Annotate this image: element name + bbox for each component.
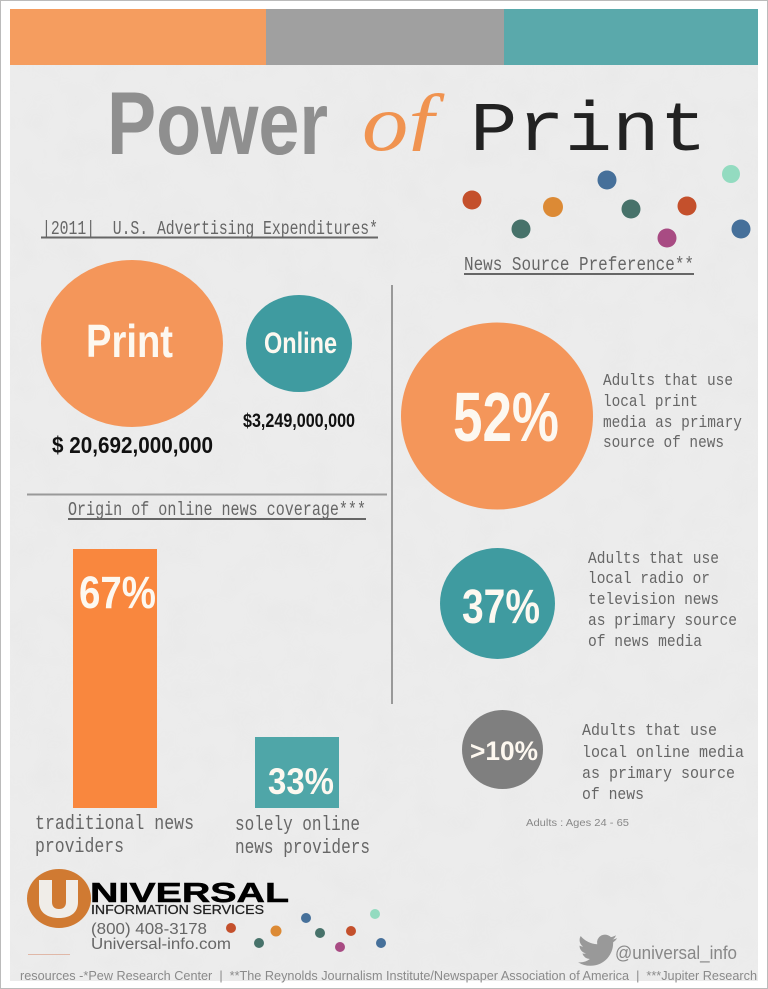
52% circle <box>401 322 593 510</box>
online circle <box>246 295 352 392</box>
print circle: Print <box>86 315 173 367</box>
decorative dots top <box>462 165 750 248</box>
online amount: $3,249,000,000 <box>243 411 355 432</box>
label: solely online: solely online <box>235 814 360 837</box>
title <box>112 92 699 155</box>
>10% circle: >10% <box>470 736 538 766</box>
ages note: Adults : Ages 24 - 65 <box>526 818 629 829</box>
twitter handle: @universal_info <box>615 942 737 964</box>
37% circle: 37% <box>462 581 540 634</box>
title: Power <box>107 73 328 173</box>
37% description: television news <box>588 591 719 610</box>
>10% description: as primary source <box>582 765 735 784</box>
sources footer: resources -*Pew Research Center | **The Reynolds Journalism Institute/Newspaper Association of America | ***Jupiter Research <box>20 968 757 983</box>
icon: twitter bird <box>578 935 617 966</box>
decorative dots bottom <box>226 909 386 952</box>
>10% circle <box>462 710 543 789</box>
print circle <box>41 260 223 427</box>
52% description: local print <box>603 393 698 412</box>
heading: advertising expenditures: |2011| U.S. Advertising Expenditures* <box>42 218 378 240</box>
52% circle: 52% <box>453 378 559 456</box>
>10% description: Adults that use <box>582 722 717 741</box>
bar: 33%: 33% <box>268 761 334 802</box>
52% description: media as primary <box>603 414 742 433</box>
37% description: of news media <box>588 633 702 652</box>
heading: news source preference: News Source Preference** <box>464 254 694 276</box>
bar: 67% <box>73 549 157 808</box>
contact: (800) 408-3178 <box>91 921 207 938</box>
divider lines <box>27 285 393 704</box>
52% description: source of news <box>603 434 724 453</box>
title: Print <box>470 93 707 172</box>
print amount: $ 20,692,000,000 <box>52 432 213 458</box>
online circle: Online <box>264 327 337 360</box>
>10% description: local online media <box>582 744 744 763</box>
title: of <box>362 80 445 168</box>
logo <box>27 869 289 928</box>
bar: 67%: 67% <box>79 567 156 618</box>
top colour band <box>10 9 758 65</box>
label: traditional: traditional news <box>35 813 194 836</box>
logo: INFORMATION SERVICES <box>91 902 264 917</box>
37% circle <box>440 548 555 659</box>
contact: Universal-info.com <box>91 936 231 953</box>
label: traditional: providers <box>35 836 124 859</box>
bar: 33% <box>255 737 339 808</box>
37% description: as primary source <box>588 612 737 631</box>
52% description: Adults that use <box>603 372 733 391</box>
logo: NIVERSAL <box>90 877 289 908</box>
>10% description: of news <box>582 786 644 805</box>
37% description: Adults that use <box>588 550 719 569</box>
heading: origin of online news: Origin of online news coverage*** <box>68 499 366 521</box>
label: solely online: news providers <box>235 837 370 860</box>
37% description: local radio or <box>588 570 710 589</box>
